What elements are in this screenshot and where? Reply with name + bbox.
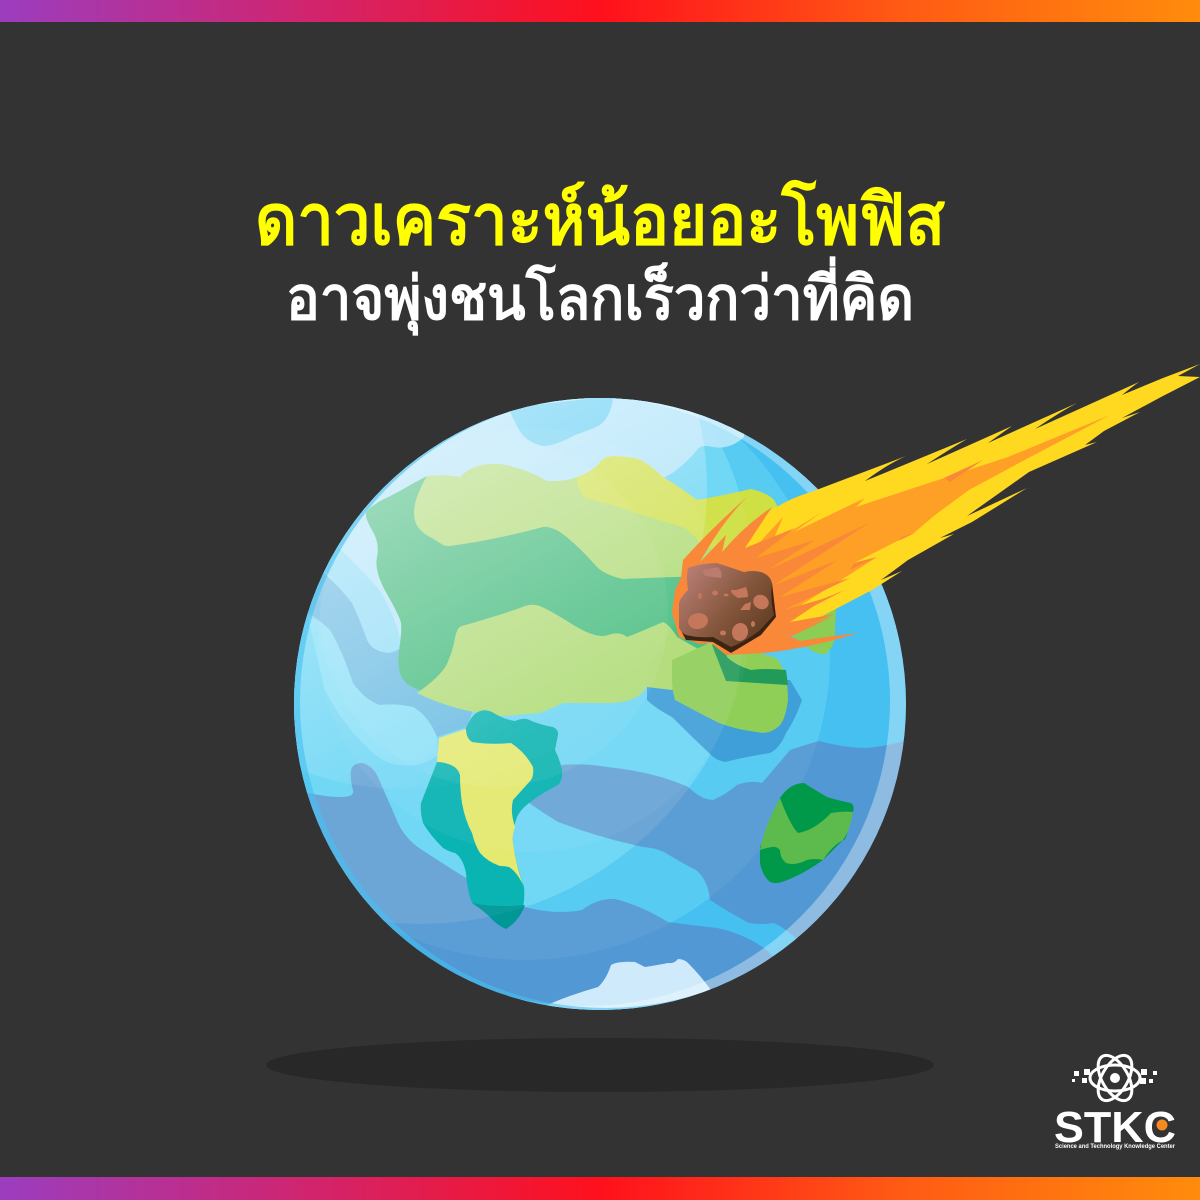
continent: green base: [366, 476, 720, 696]
southern ice cap: [547, 959, 710, 1010]
globe: [294, 398, 906, 1010]
subtitle: อาจพุ่งชนโลกเร็วกว่าที่คิด: [286, 256, 914, 336]
south continent: yellow interior: [437, 729, 533, 885]
flame: orange rim and tails: [672, 497, 869, 655]
logo tagline: Science and Technology Knowledge Center: [1055, 1144, 1176, 1150]
continent: southern light band: [417, 605, 700, 716]
rock body: [679, 563, 774, 647]
continent: eastern land: [672, 640, 788, 733]
left ocean band: [307, 573, 472, 737]
continent: northern light band: [414, 464, 730, 579]
island: light green: [760, 798, 853, 864]
top gradient bar: [0, 0, 1200, 22]
island: dark green: [760, 783, 854, 883]
ground shadow: [266, 1038, 934, 1092]
logo: STKC: [1054, 1050, 1176, 1152]
logo pixel dots: [1072, 1069, 1157, 1084]
logo wordmark: STKC: [1054, 1103, 1176, 1152]
rock craters: [687, 567, 771, 643]
south continent: teal base: [421, 710, 562, 929]
southern ocean current: [512, 803, 796, 956]
continent: yellow north: [577, 456, 778, 552]
rock shadow: [679, 583, 776, 653]
pale left ocean patch: [307, 612, 438, 766]
flame: streaks: [786, 460, 983, 637]
south continent: dark tip: [472, 903, 525, 929]
flame: yellow: [700, 364, 1200, 635]
southern dark ocean: [290, 740, 910, 1020]
left rim shade: [294, 411, 706, 1010]
logo atom icon: [1090, 1050, 1140, 1106]
lake: [647, 680, 802, 762]
title: ดาวเคราะห์น้อยอะโพฟิส: [255, 179, 945, 259]
ocean base: [294, 398, 906, 1010]
eastern dark green band: [712, 644, 788, 685]
flame: orange core: [745, 415, 1110, 612]
meteor: [672, 364, 1200, 655]
top ocean patch: [508, 396, 613, 446]
polar ocean lower strip: [320, 547, 402, 653]
far eastern land: [794, 608, 836, 654]
bottom gradient bar: [0, 1177, 1200, 1200]
rim light: [510, 400, 906, 1010]
pale polar ocean: [324, 398, 744, 652]
logo orange dot: [1156, 1120, 1168, 1130]
highlight overlays: [294, 398, 742, 916]
